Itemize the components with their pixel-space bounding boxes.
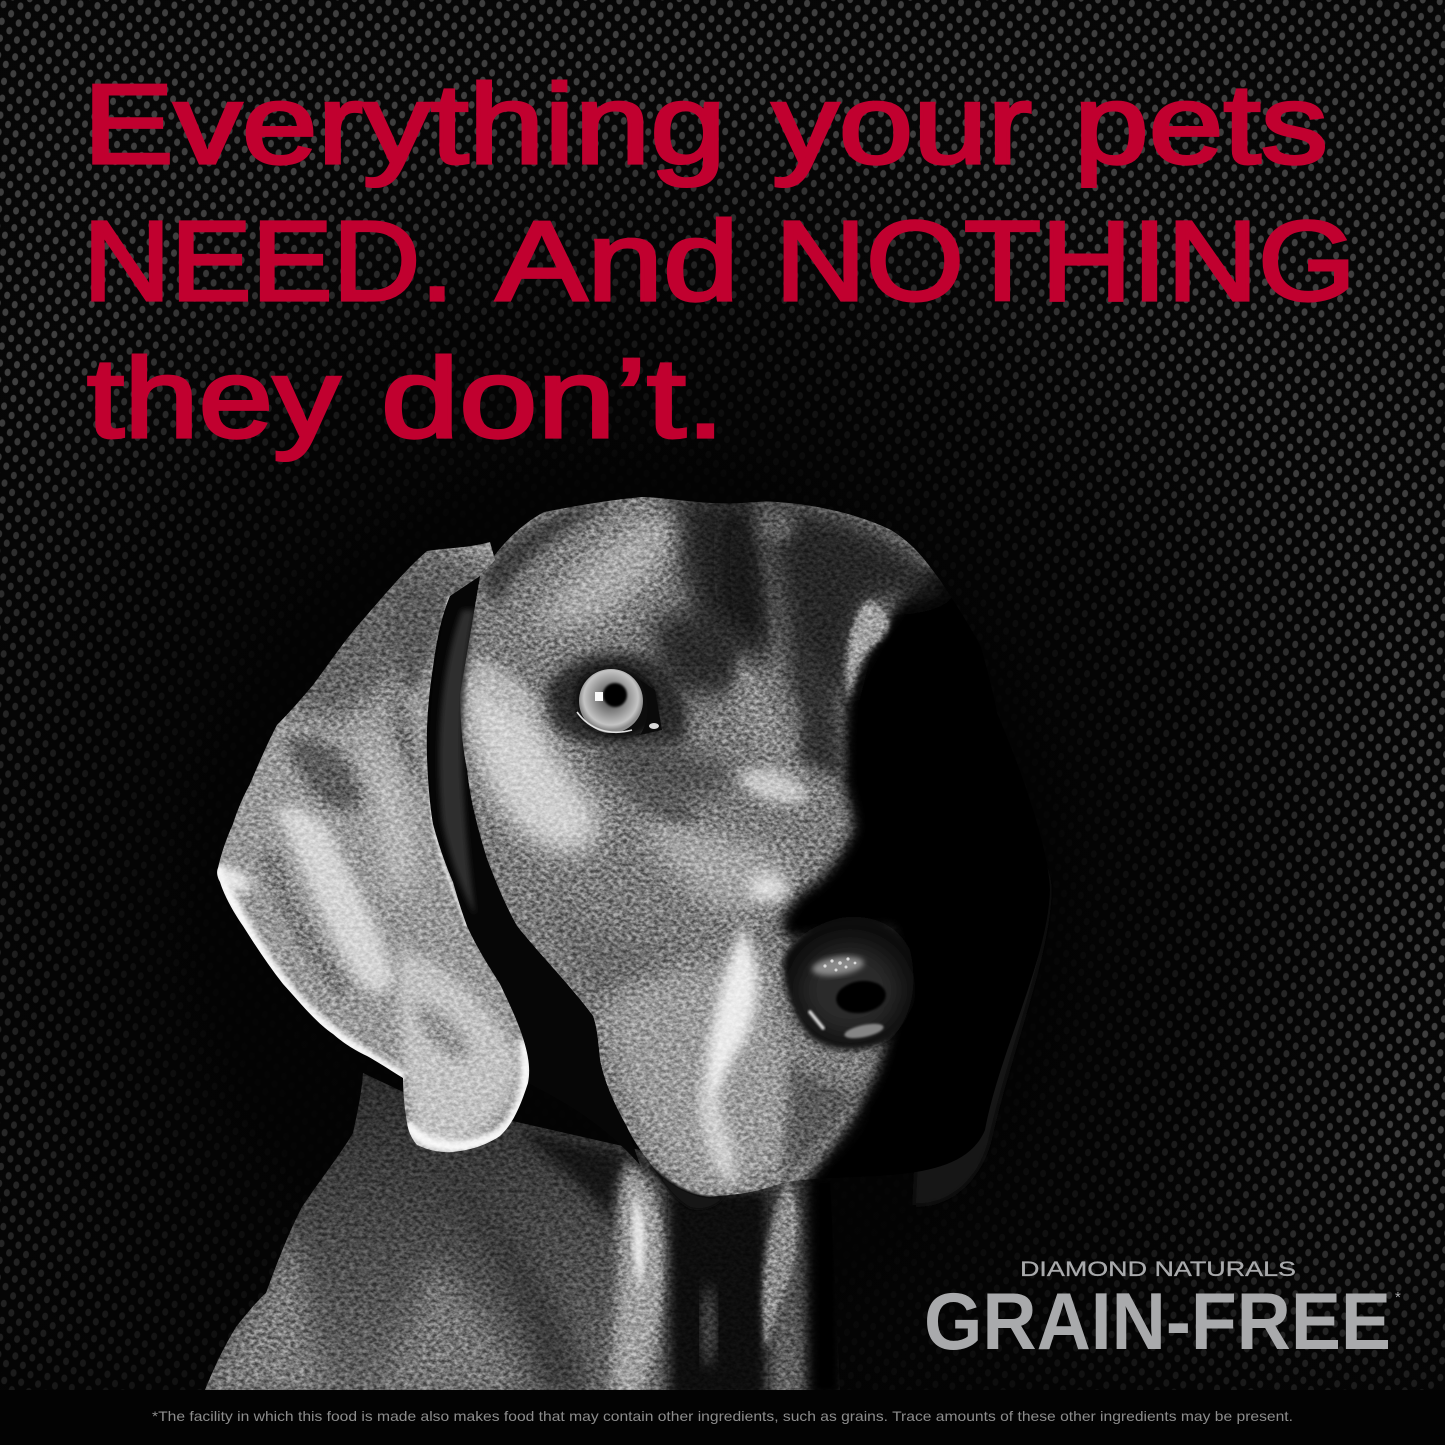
face shadow: right half xyxy=(773,564,1050,1180)
headline: your xyxy=(772,61,1032,187)
headline: NOTHING xyxy=(775,198,1356,324)
logo: Diamond Naturals Grain-Free: * xyxy=(1395,1289,1401,1306)
dog nose xyxy=(783,917,913,1050)
dog body and chest xyxy=(200,1060,850,1400)
dog head with lit face and shadow side xyxy=(460,497,1050,1197)
headline: NEED. xyxy=(83,198,454,324)
headline xyxy=(83,61,1356,461)
headline: pets xyxy=(1074,61,1328,187)
dark fold between ear and face xyxy=(430,576,640,1165)
headline: And xyxy=(496,198,739,324)
dog mouth xyxy=(650,1165,724,1209)
headline: they xyxy=(87,335,341,461)
muzzle xyxy=(600,960,850,1200)
logo: Diamond Naturals Grain-Free: DIAMOND NATURALS xyxy=(1020,1257,1296,1281)
footnote: *The facility in which this food is made also makes food that may contain other ingredients, such as grains. Trace amounts of these other ingredients may be present. xyxy=(152,1409,1293,1424)
forehead tones xyxy=(480,500,620,610)
brow and eye socket shadow xyxy=(545,653,688,750)
logo: Diamond Naturals Grain-Free: GRAIN-FREE xyxy=(924,1277,1391,1367)
headline: Everything xyxy=(83,61,726,187)
dog ear xyxy=(210,530,540,1170)
cheek highlights xyxy=(462,670,600,853)
dog far ear in shadow xyxy=(914,760,1050,1205)
headline: don’t. xyxy=(381,335,725,461)
dog eye xyxy=(566,657,666,747)
photo: dog portrait xyxy=(200,480,1070,1400)
